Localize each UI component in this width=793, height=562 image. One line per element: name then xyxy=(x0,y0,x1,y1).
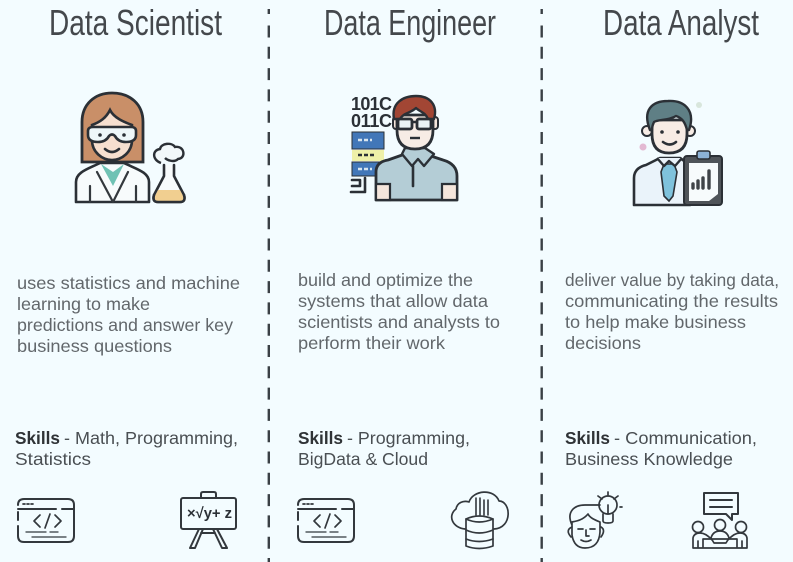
skills: Business Knowledge xyxy=(565,449,733,469)
column: Data Engineer xyxy=(298,2,508,548)
icon: meeting with speech bubble xyxy=(692,493,747,548)
description: scientists and analysts to xyxy=(298,312,500,332)
skills: - Programming, xyxy=(347,428,470,448)
description: business questions xyxy=(17,336,172,356)
heading: Data Engineer: Data Engineer xyxy=(324,2,496,43)
icon: engineer with server: 011C xyxy=(351,111,392,131)
description: learning to make xyxy=(17,294,150,314)
description: predictions and answer key xyxy=(17,315,233,335)
description: decisions xyxy=(565,333,641,353)
description: uses statistics and machine xyxy=(17,273,240,293)
column: Data Analyst xyxy=(565,2,779,548)
icon: scientist with flask xyxy=(76,93,184,202)
icon: engineer with server xyxy=(351,94,457,200)
description: to help make business xyxy=(565,312,746,332)
skills: - Math, Programming, xyxy=(64,428,238,448)
icon: engineer with server: 101C xyxy=(351,94,392,114)
description: communicating the results xyxy=(565,291,778,311)
skills: Skills xyxy=(15,428,60,448)
heading: Data Scientist: Data Scientist xyxy=(49,2,222,43)
column: Data Scientist xyxy=(15,2,240,548)
icon: code window xyxy=(298,499,354,542)
skills: BigData & Cloud xyxy=(298,449,428,469)
icon: math board xyxy=(181,492,236,548)
skills: Skills xyxy=(565,428,610,448)
icon: code window xyxy=(18,499,74,542)
icon: analyst with clipboard xyxy=(634,101,722,205)
skills: - Communication, xyxy=(614,428,757,448)
icon: math board: ×√y+ z xyxy=(187,505,232,522)
description: deliver value by taking data, xyxy=(565,270,779,290)
skills: Statistics xyxy=(15,449,91,469)
description: build and optimize the xyxy=(298,270,473,290)
skills: Skills xyxy=(298,428,343,448)
icon: head with light bulb xyxy=(568,492,622,548)
description: systems that allow data xyxy=(298,291,488,311)
description: perform their work xyxy=(298,333,445,353)
icon: cloud database xyxy=(452,492,508,548)
